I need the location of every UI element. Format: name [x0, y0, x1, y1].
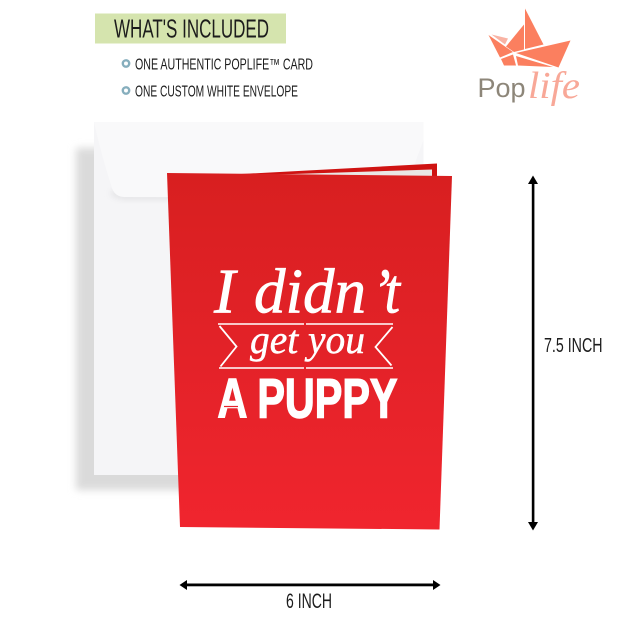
list item: envelope: ONE CUSTOM WHITE ENVELOPE: [135, 84, 298, 100]
arrow: width dimension: [180, 580, 440, 590]
card back: [167, 164, 437, 178]
heading: what's included: WHAT'S INCLUDED: [114, 14, 269, 44]
logo wordmark: life: [528, 65, 580, 107]
icon: origami boat: [488, 8, 570, 68]
card message: A PUPPY: A PUPPY: [218, 366, 398, 430]
envelope: [76, 122, 424, 490]
logo wordmark: Pop: [478, 73, 526, 103]
card banner: [218, 324, 393, 368]
greeting card: [167, 164, 452, 530]
arrow: height dimension: [528, 176, 538, 530]
card message: get you: get you: [250, 317, 365, 362]
card message: I didn't: I: [213, 256, 238, 326]
heading: what's included: [95, 14, 286, 44]
label: 6 inch: 6 INCH: [286, 590, 332, 613]
card message: I didn't: didn: [254, 256, 366, 326]
list item: card: [123, 56, 313, 74]
logo: Poplife: [478, 8, 580, 107]
card front: [167, 173, 452, 530]
list item: card: ONE AUTHENTIC POPLIFE™ CARD: [135, 56, 313, 74]
panel: what's included: [95, 14, 313, 100]
card message: I didn't: ’t: [372, 256, 402, 326]
list item: envelope: [123, 84, 298, 100]
logo wordmark: [478, 65, 580, 107]
envelope shadow: [76, 148, 326, 490]
envelope flap: [94, 122, 424, 201]
envelope body: [94, 122, 424, 475]
